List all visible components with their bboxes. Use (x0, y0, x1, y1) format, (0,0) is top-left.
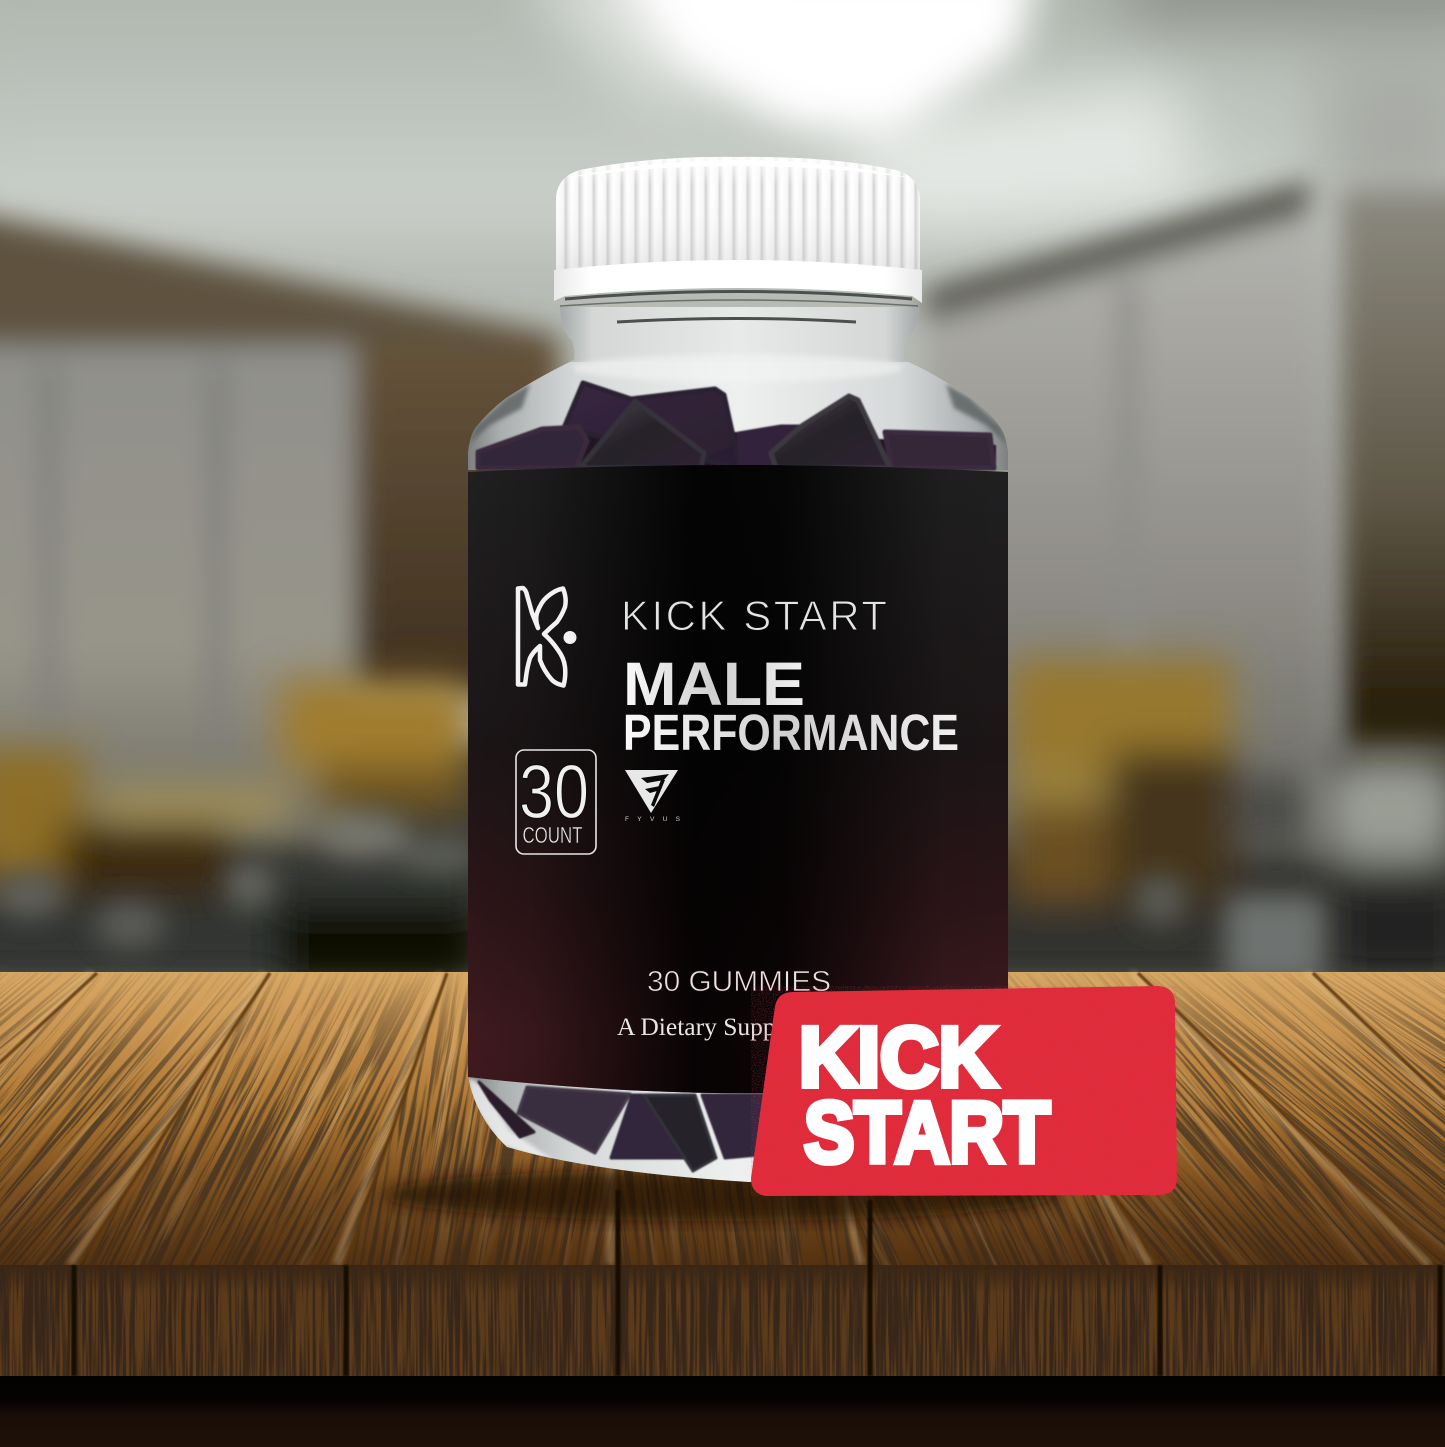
FYVUS logo: FYVUS (625, 816, 681, 823)
ribbed cap top (556, 157, 920, 272)
gummies at top (478, 383, 996, 470)
product title: PERFORMANCE (623, 704, 959, 761)
blurred interior background (0, 0, 1445, 985)
table front edge (0, 1190, 1445, 1376)
sticker wordmark: KICK (799, 1010, 997, 1104)
dietary supplement line: A Dietary Supplement (617, 1012, 845, 1041)
brand name: KICK START (621, 592, 887, 639)
count badge: 30 (519, 750, 589, 835)
black product label (468, 465, 1008, 1093)
neck highlights (560, 292, 918, 322)
clear glass body (468, 292, 1008, 1190)
supplement bottle (468, 157, 1008, 1190)
product title (623, 650, 959, 761)
product title: MALE (623, 650, 805, 718)
serving count: 30 GUMMIES (647, 966, 831, 998)
white screw cap (554, 157, 922, 303)
FYVUS logo (625, 770, 681, 823)
table underside (0, 1376, 1445, 1447)
sticker wordmark (799, 1010, 1050, 1181)
gummies at bottom (479, 1082, 767, 1171)
Kick Start red sticker (751, 986, 1177, 1196)
brand K logo (518, 588, 576, 686)
cap band (554, 260, 922, 303)
wooden table (0, 972, 1445, 1447)
sticker wordmark: START (804, 1085, 1050, 1181)
bottle shadow on table (380, 1169, 1060, 1221)
count badge: COUNT (522, 822, 582, 848)
table top surface (0, 972, 1445, 1268)
